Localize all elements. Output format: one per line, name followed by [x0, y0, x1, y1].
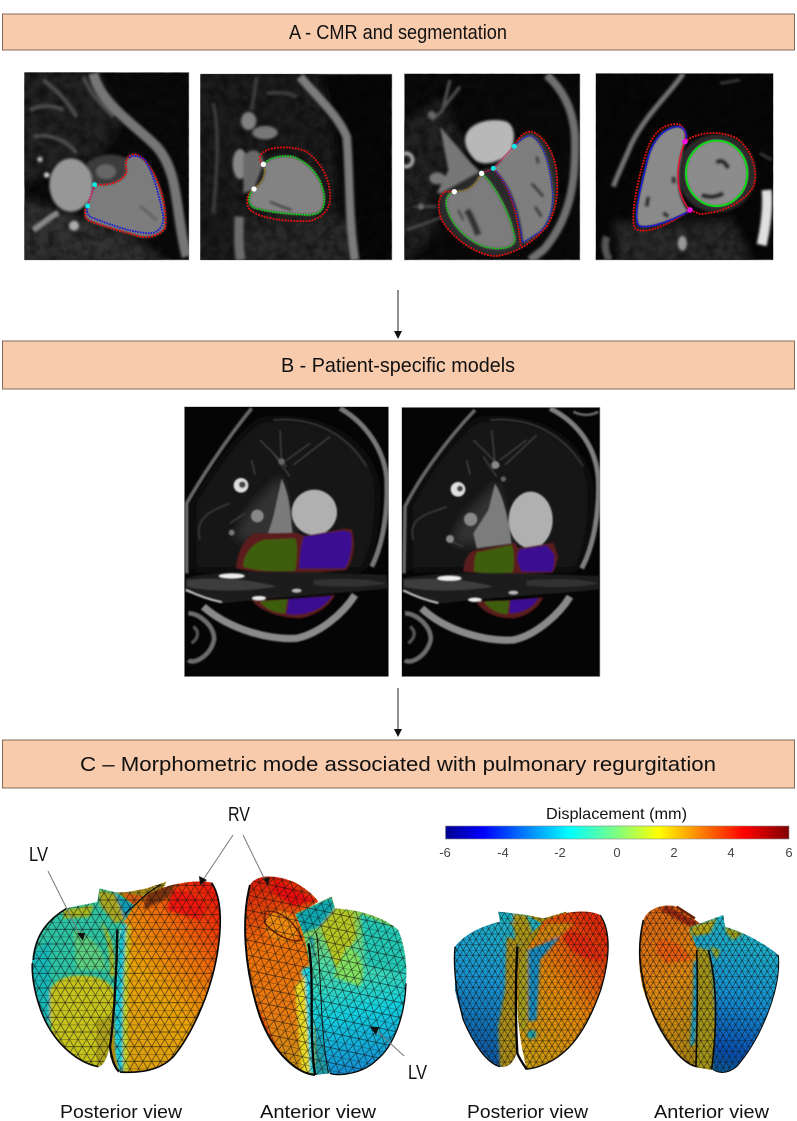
heart mesh: small mode, anterior view — [637, 903, 783, 1077]
panel: patient-specific model overlay, first patient — [184, 407, 389, 677]
label: RV with pointer arrows — [199, 804, 270, 885]
colour bar tick labels: 0 — [613, 845, 621, 860]
colour bar tick labels: -4 — [497, 845, 509, 860]
label: LV with pointer arrow, anterior view: LV — [408, 1062, 428, 1084]
colour bar tick labels: -2 — [554, 845, 566, 860]
heading: B - Patient-specific models — [2, 341, 794, 389]
heading: A - CMR and segmentation — [2, 14, 794, 50]
heart mesh: large mode, anterior view — [240, 873, 408, 1078]
panel: CMR long-axis view with left ventricle contour — [197, 70, 392, 267]
contour: right ventricle epicardium and endocardium — [85, 154, 166, 237]
label: RV with pointer arrows: RV — [228, 804, 251, 826]
colour bar: displacement in mm — [439, 806, 793, 860]
colour bar tick labels: -6 — [439, 845, 451, 860]
colour bar scale — [446, 826, 789, 839]
heading: A - CMR and segmentation: A - CMR and segmentation — [289, 22, 507, 44]
panel: CMR four-chamber view with biventricular contours — [399, 74, 580, 267]
colour bar tick labels: 6 — [785, 845, 793, 860]
label: LV with pointer arrow, posterior view: LV — [29, 844, 49, 866]
panel: patient-specific model overlay, second patient — [402, 407, 600, 677]
label: LV with pointer arrow, posterior view — [29, 844, 85, 941]
colour bar tick labels — [439, 845, 793, 860]
heart mesh: large mode, posterior view — [27, 877, 223, 1077]
label: LV with pointer arrow, anterior view — [370, 1027, 428, 1084]
panel: CMR short-axis view with biventricular contours — [596, 73, 773, 267]
heading: C - Morphometric mode associated with pulmonary regurgitation — [2, 740, 794, 788]
heading: C - Morphometric mode associated with pulmonary regurgitation: C – Morphometric mode associated with pulmonary regurgitation — [80, 754, 716, 776]
colour bar tick labels: 2 — [670, 845, 678, 860]
heading: B - Patient-specific models: B - Patient-specific models — [281, 355, 515, 377]
colour bar tick labels: 4 — [727, 845, 735, 860]
contour: short-axis epicardium and endocardium — [633, 124, 755, 231]
heart mesh: small mode, posterior view — [450, 908, 613, 1072]
contour: biventricular epicardium, septum and endocardium — [439, 132, 557, 256]
arrow: A to B — [394, 290, 402, 339]
arrow: B to C — [394, 688, 402, 737]
contour: left ventricle epicardium and endocardium — [247, 147, 330, 221]
colour bar title: Displacement (mm) — [546, 806, 687, 823]
panel: CMR long-axis view with right ventricle contour — [20, 70, 189, 267]
